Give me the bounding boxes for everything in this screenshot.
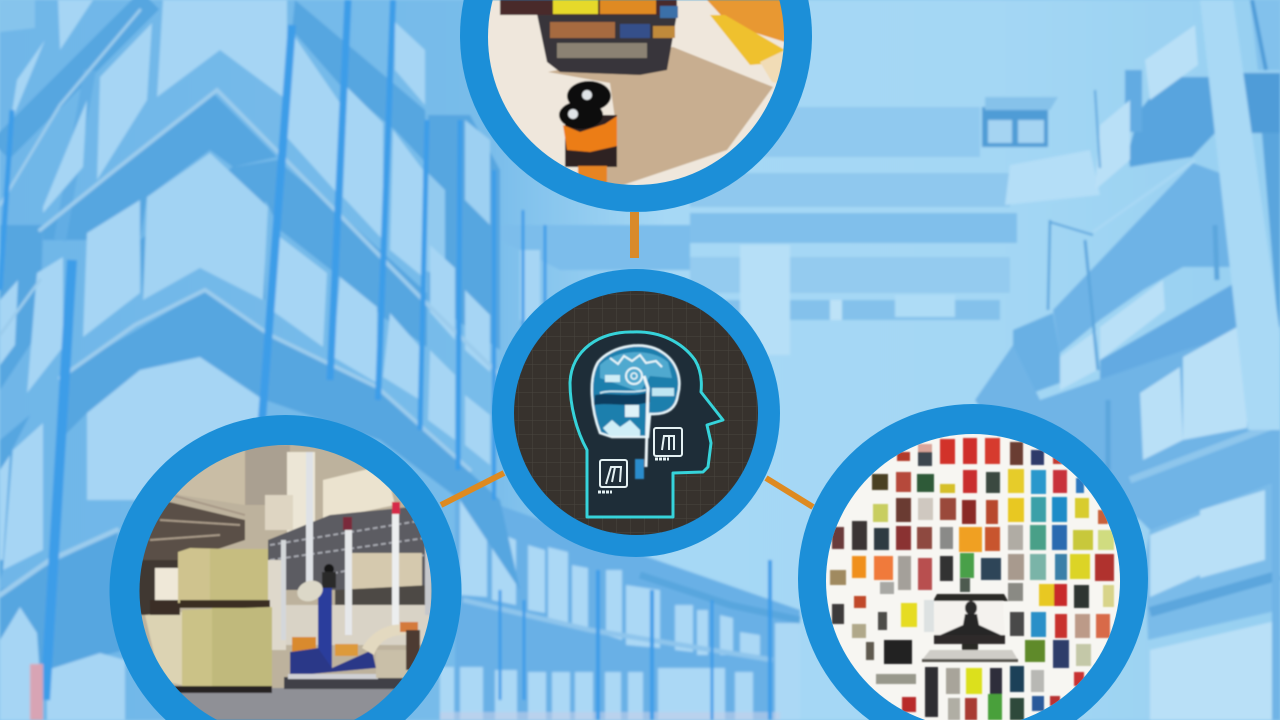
product row 9 bbox=[876, 666, 1084, 717]
product row 3 bbox=[873, 497, 1108, 524]
left rack: dark structure bbox=[0, 0, 690, 670]
hub node: AI head icon bbox=[492, 269, 780, 557]
head silhouette bbox=[570, 332, 723, 517]
ring bbox=[492, 269, 780, 557]
brain circuit bbox=[592, 345, 679, 479]
photo node: top, tool bag and canister bbox=[460, 0, 812, 212]
computer with silhouette bbox=[922, 578, 1018, 662]
product row 10 bbox=[902, 694, 1060, 720]
product row 6 bbox=[880, 582, 1114, 608]
dark textured disc bbox=[514, 291, 758, 535]
connector: centre to right bbox=[766, 478, 813, 507]
ring bbox=[460, 0, 812, 212]
product row 8 bbox=[852, 624, 1091, 668]
chip icon left bbox=[598, 460, 627, 492]
photo bbox=[140, 445, 432, 720]
product row 5 bbox=[830, 553, 1114, 590]
product row 2 bbox=[872, 469, 1084, 494]
chip icon right bbox=[654, 428, 682, 459]
lower aisle bays bbox=[440, 490, 800, 720]
left rack: pale boxes bbox=[0, 0, 540, 720]
ring bbox=[798, 404, 1148, 720]
right rack: shelves, boxes and thin posts bbox=[975, 0, 1280, 720]
photo node: right, product wall and computer bbox=[798, 404, 1148, 720]
photo node: left, warehouse robot and pallets bbox=[110, 415, 462, 720]
photo bbox=[820, 430, 1130, 720]
ring bbox=[110, 415, 462, 720]
product row 7 bbox=[832, 596, 1110, 638]
connector: top to centre bbox=[630, 212, 639, 258]
product row 4 bbox=[832, 521, 1114, 552]
connector: left to centre bbox=[441, 473, 504, 505]
product row 1 bbox=[897, 438, 1063, 466]
photo bbox=[485, 0, 790, 190]
far aisle: wall bands and window bbox=[690, 97, 1100, 355]
left rack: bright uprights bbox=[0, 0, 770, 720]
left rack: pale beam edges bbox=[0, 10, 500, 595]
